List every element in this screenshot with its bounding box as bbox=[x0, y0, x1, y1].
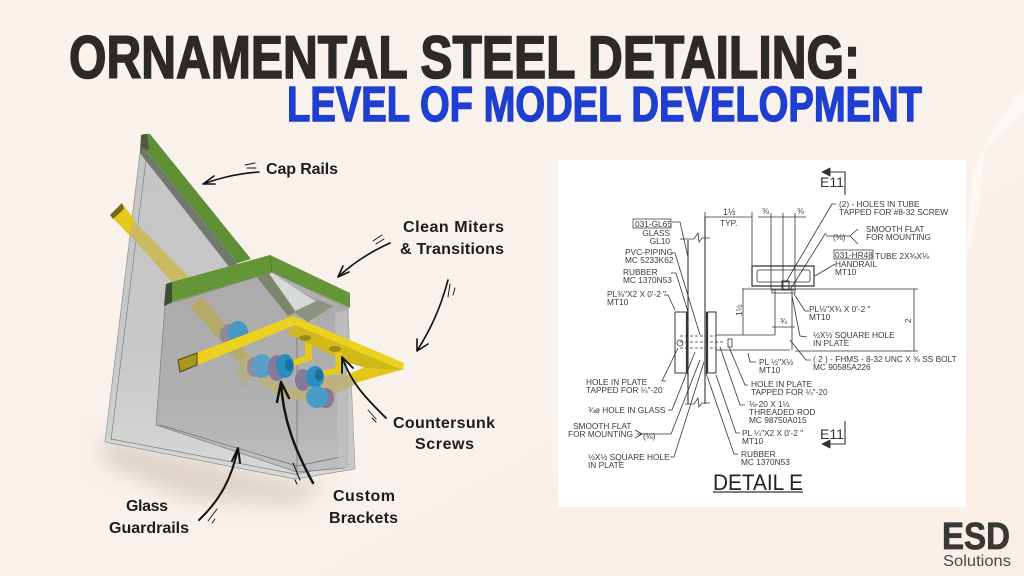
drawing labels: IN PLATE bbox=[813, 338, 850, 348]
callout: Custom Brackets: Brackets bbox=[329, 510, 398, 527]
yellow handrail right arm bbox=[293, 316, 404, 370]
callout: Countersunk Screws bbox=[342, 280, 495, 453]
gap in handrail return bbox=[347, 363, 365, 375]
countersunk screws bbox=[299, 335, 341, 352]
callout: Countersunk Screws: Countersunk bbox=[393, 415, 495, 432]
yellow handrail left arm bbox=[197, 316, 295, 365]
detail caption: DETAIL E bbox=[713, 470, 803, 495]
drawing labels: IN PLATE bbox=[588, 460, 625, 470]
callout: Cap Rails bbox=[203, 161, 338, 184]
yellow handrail underside bbox=[287, 325, 403, 370]
callout: Clean Miters and Transitions: & Transitions bbox=[400, 241, 504, 258]
handrail cut end bbox=[178, 353, 197, 372]
drawing labels: HOLE IN PLATE bbox=[751, 379, 813, 389]
drawing labels: FOR MOUNTING bbox=[866, 232, 931, 242]
drawing labels: TAPPED FOR #8-32 SCREW bbox=[839, 207, 948, 217]
callout: Glass Guardrails bbox=[109, 448, 240, 537]
callout: Clean Miters and Transitions bbox=[338, 219, 504, 277]
drawing labels: ⅛-20 X 1½ bbox=[749, 399, 790, 409]
callout: Custom Brackets bbox=[277, 382, 398, 527]
drawing labels: MC 90585A226 bbox=[813, 362, 871, 372]
cap rail dark end bbox=[164, 282, 172, 306]
drawing labels: ⅜ bbox=[797, 206, 804, 216]
drawing labels: MT10 bbox=[759, 365, 781, 375]
callout: Clean Miters and Transitions: Clean Miters bbox=[403, 219, 504, 236]
custom bracket arms bbox=[286, 342, 312, 368]
drawing labels: MT10 bbox=[809, 312, 831, 322]
drawing labels: PL⅛"X¾ X 0'-2 " bbox=[809, 304, 870, 314]
callout: Glass Guardrails: Guardrails bbox=[109, 520, 189, 537]
section marker E11 bottom: E11 bbox=[820, 426, 844, 442]
drawing labels: RUBBER bbox=[623, 267, 658, 277]
drawing labels: ⅜ bbox=[762, 206, 769, 216]
rear handrail through front glass bbox=[190, 298, 250, 360]
drawing labels: TAPPED FOR ¼"-20 bbox=[751, 387, 828, 397]
drawing labels: MC 98750A015 bbox=[749, 415, 807, 425]
rear green cap rail bbox=[143, 134, 251, 263]
drawing labels: MT10 bbox=[607, 297, 629, 307]
drawing labels: SMOOTH FLAT bbox=[573, 421, 631, 431]
drawing linework bbox=[633, 168, 918, 492]
drawing labels: RUBBER bbox=[741, 449, 776, 459]
front green cap rail with miter bbox=[172, 255, 350, 308]
drawing labels: ¾ bbox=[780, 316, 788, 326]
drawing labels: MC 1370N53 bbox=[623, 275, 672, 285]
drawing labels: PL⅜"X2 X 0'-2 " bbox=[607, 289, 666, 299]
drawing labels: HANDRAIL bbox=[835, 259, 877, 269]
section marker E11 top: E11 bbox=[820, 174, 844, 190]
panel: Detail E technical drawing bbox=[558, 160, 966, 507]
drawing labels: THREADED ROD bbox=[749, 407, 815, 417]
drawing labels bbox=[568, 199, 957, 470]
drawing labels: PL ¼"X2 X 0'-2 " bbox=[742, 428, 803, 438]
drawing labels: 1½ bbox=[734, 304, 744, 316]
drawing labels: MC 5233K62 bbox=[625, 255, 674, 265]
callout: Countersunk Screws: Screws bbox=[415, 436, 474, 453]
drawing labels: ½X½ SQUARE HOLE bbox=[813, 330, 895, 340]
callout: Glass Guardrails: Glass bbox=[126, 498, 168, 515]
drawing labels: PVC-PIPING bbox=[625, 247, 673, 257]
drawing labels: 2 bbox=[903, 318, 913, 323]
standoff: rear left bbox=[220, 321, 248, 346]
drawing labels: TUBE 2X¾X⅛ bbox=[875, 251, 929, 261]
drawing labels: (⅛) bbox=[833, 232, 846, 242]
drawing labels: HOLE IN PLATE bbox=[586, 377, 648, 387]
standoff: right pair bbox=[295, 366, 324, 391]
drawing labels: TAPPED FOR ¼"-20 bbox=[586, 385, 663, 395]
drawing labels: GL10 bbox=[650, 236, 670, 246]
logo: ESD Solutions: ESD bbox=[942, 516, 1010, 558]
callout: Custom Brackets: Custom bbox=[333, 488, 395, 505]
drawing labels: MC 1370N53 bbox=[741, 457, 790, 467]
drawing labels: SMOOTH FLAT bbox=[866, 224, 924, 234]
logo: ESD Solutions: Solutions bbox=[943, 553, 1011, 570]
rear yellow handrail exposed end bbox=[110, 203, 134, 235]
rear yellow handrail seen through glass bbox=[127, 217, 250, 360]
standoff: lower bbox=[306, 386, 334, 408]
drawing labels: MT10 bbox=[742, 436, 764, 446]
drawing labels: ( 2 ) - FHMS - 8-32 UNC X ⅜ SS BOLT bbox=[813, 354, 957, 364]
drawing labels: 031-GL65 bbox=[635, 219, 672, 229]
title bbox=[69, 24, 922, 132]
rear glass panel bbox=[105, 153, 355, 479]
translucent brackets bbox=[236, 357, 365, 404]
glass shadow bbox=[100, 435, 330, 505]
callout: Cap Rails: Cap Rails bbox=[266, 161, 338, 178]
handrail return bbox=[347, 367, 404, 383]
drawing labels: TYP. bbox=[720, 218, 737, 228]
drawing labels: 1½ bbox=[723, 207, 736, 217]
drawing labels: ½X½ SQUARE HOLE bbox=[588, 452, 670, 462]
front glass panel bbox=[156, 272, 348, 472]
drawing labels: ¾ø HOLE IN GLASS bbox=[588, 405, 666, 415]
drawing labels: (2) - HOLES IN TUBE bbox=[839, 199, 920, 209]
drawing labels: (⅛) bbox=[643, 431, 656, 441]
through view behind the miter bbox=[261, 273, 316, 311]
3D model: glass guardrail with cap rail and handrail bbox=[100, 134, 404, 505]
drawing labels: PL ½"X½ bbox=[759, 357, 794, 367]
standoff: centre pair bbox=[247, 354, 294, 381]
drawing labels: FOR MOUNTING bbox=[568, 429, 633, 439]
drawing labels: MT10 bbox=[835, 267, 857, 277]
drawing labels: 031-HR48 bbox=[835, 250, 873, 260]
drawing labels: GLASS bbox=[642, 228, 670, 238]
